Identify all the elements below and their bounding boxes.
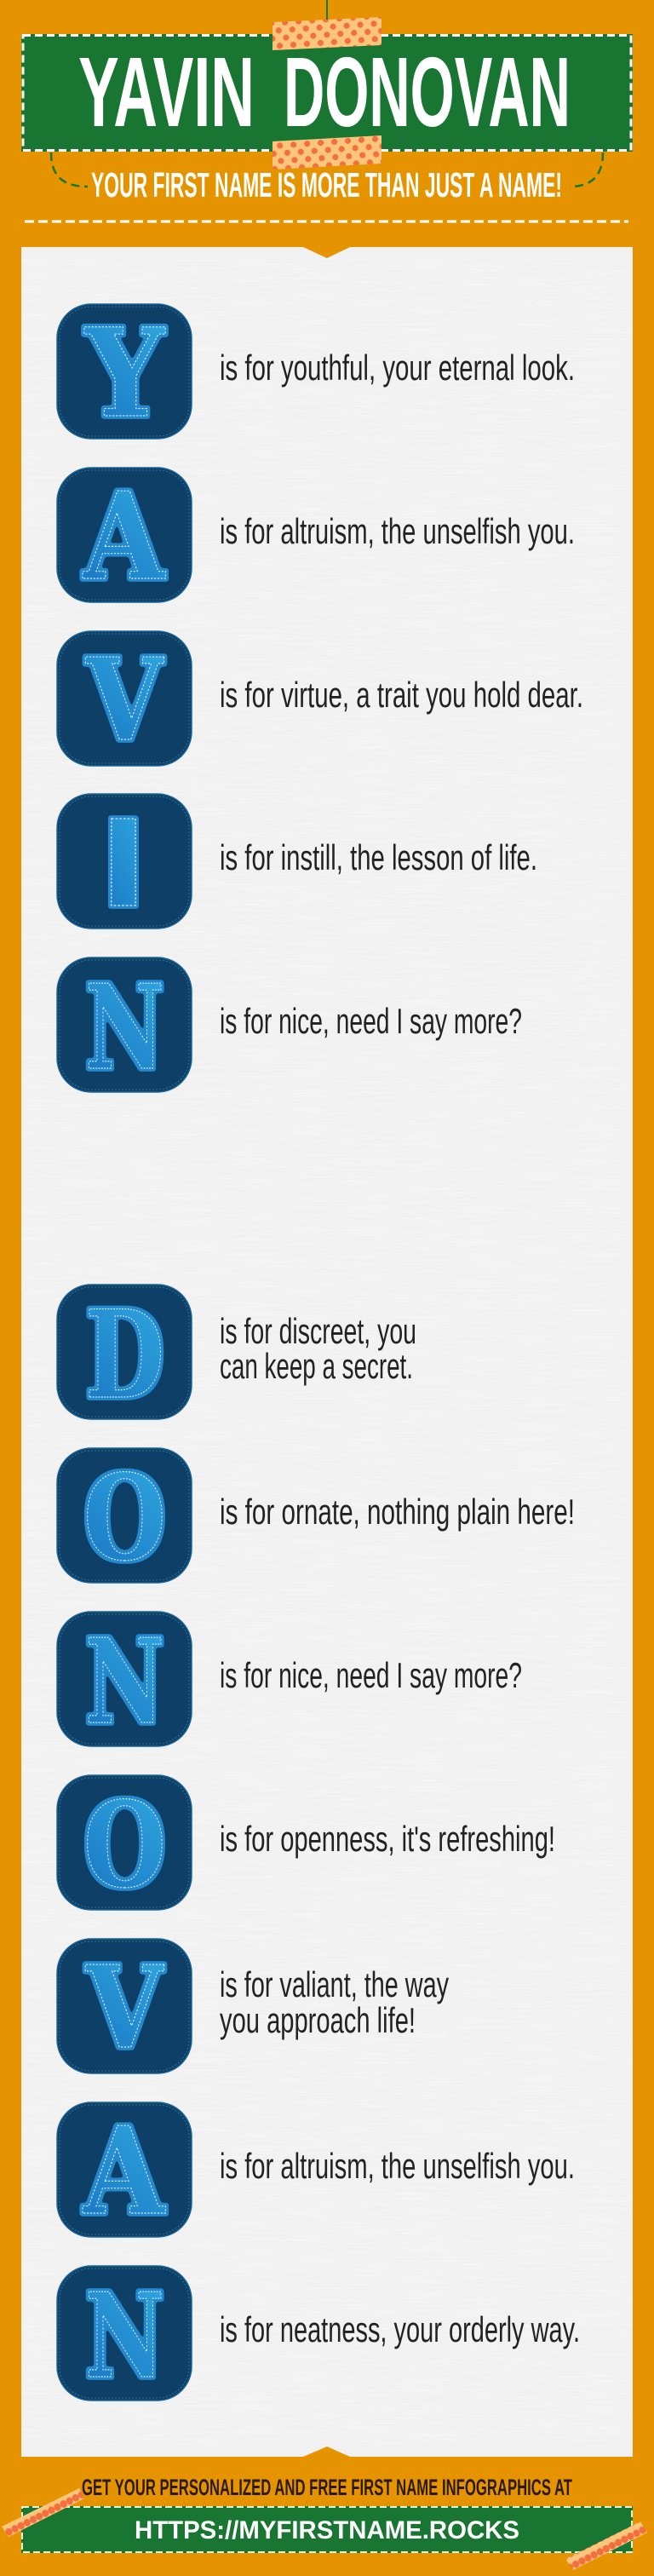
row: Y [57,302,575,445]
badge A: A [82,2102,165,2242]
row: D [57,1285,416,1426]
row: V [57,631,583,767]
text V: you approach life! [220,2000,416,2040]
footer url: HTTPS://MYFIRSTNAME.ROCKS [135,2516,519,2544]
row: N [57,957,522,1096]
row: O [57,1448,575,1587]
connector: left [51,152,88,187]
badge I [57,794,192,934]
tape: footer left [2,2488,84,2537]
badge V: V [85,1941,164,2074]
badge N: N [85,1613,164,1751]
row: N [57,1612,522,1751]
badge A [57,467,192,607]
text D: is for discreet, you [220,1311,416,1351]
connector: right [570,152,603,187]
tape: bottom of title [272,135,382,170]
dashed divider [25,220,628,223]
row: I [57,794,537,934]
badge A: A [82,467,165,607]
header string [326,0,328,20]
text V: is for valiant, the way [220,1964,449,2004]
badge Y: Y [83,302,166,445]
badge O: O [83,1775,166,1914]
title: YAVIN [78,37,255,147]
text D: can keep a secret. [220,1346,413,1386]
title banner [21,34,633,152]
badge V [57,631,192,767]
row: N [57,2266,580,2405]
badge A [57,2102,192,2242]
badge N: N [85,2268,164,2405]
row: A [57,2102,575,2242]
row: O [57,1775,555,1914]
badge V: V [85,634,164,767]
badge D: D [85,1285,164,1426]
badge N: N [85,959,164,1096]
row: V [57,1939,449,2074]
badge V [57,1939,192,2074]
row: A [57,467,575,607]
badge I: I [100,796,147,934]
badge O: O [83,1448,166,1587]
tape: footer right [565,2521,647,2570]
tape: top [272,17,382,50]
badge Y [57,302,192,445]
footer banner [21,2506,633,2553]
